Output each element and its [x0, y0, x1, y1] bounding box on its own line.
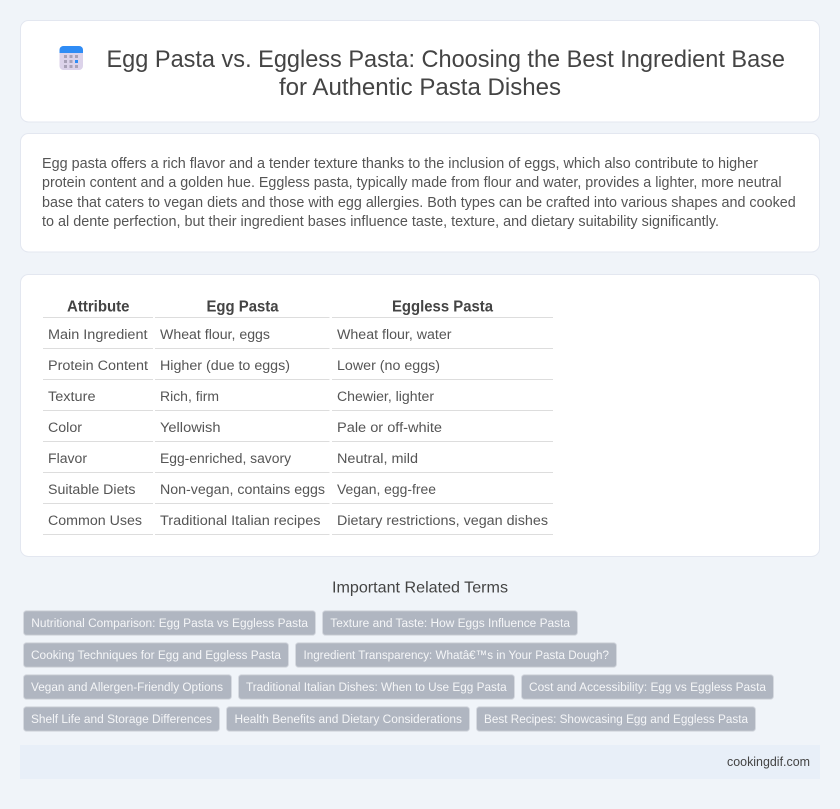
panel: title header [20, 20, 820, 122]
tag: Shelf Life and Storage Differences [31, 712, 212, 726]
table header: Egg Pasta [206, 298, 279, 316]
table row: protein content: Protein Content [48, 358, 148, 374]
table row: texture: Texture [48, 389, 96, 405]
table row: flavor: Egg-enriched, savory [160, 451, 292, 467]
table row: common uses [48, 513, 548, 529]
table row: flavor: Flavor [48, 451, 87, 467]
text block: introduction: protein content and a golden hue. Eggless pasta, typically made from flour and water, provides a lighter, more neutral [42, 175, 782, 191]
tag [24, 611, 316, 635]
table row: common uses: Traditional Italian recipes [160, 513, 320, 529]
table header [67, 298, 493, 316]
table row: protein content: Lower (no eggs) [337, 358, 440, 374]
tag: Ingredient Transparency: Whatâ€™s in Your Pasta Dough? [304, 648, 609, 662]
tag: Best Recipes: Showcasing Egg and Eggless Pasta [484, 712, 748, 726]
tag: Traditional Italian Dishes: When to Use Egg Pasta [246, 680, 507, 694]
tag [522, 675, 774, 699]
tag [226, 707, 470, 731]
table row: flavor: Neutral, mild [337, 451, 418, 467]
text block: introduction: base that caters to vegan diets and those with egg allergies. Both types can be crafted into various shapes and cooked [42, 195, 796, 211]
tag [24, 675, 232, 699]
table row: main ingredient [48, 327, 452, 343]
table row: main ingredient: Main Ingredient [48, 327, 148, 343]
table row: suitable diets: Non-vegan, contains eggs [160, 482, 325, 498]
tag [238, 675, 514, 699]
tag: Vegan and Allergen-Friendly Options [31, 680, 223, 694]
tag: Cooking Techniques for Egg and Eggless Pasta [31, 648, 281, 662]
table row: color: Color [48, 420, 82, 436]
table row: texture: Chewier, lighter [337, 389, 434, 405]
tag [24, 643, 288, 667]
table header: Eggless Pasta [392, 298, 493, 316]
footer [20, 745, 820, 779]
tag [296, 643, 616, 667]
table row: suitable diets: Vegan, egg-free [337, 482, 436, 498]
title: for Authentic Pasta Dishes [279, 74, 561, 101]
panel: comparison table [20, 274, 820, 556]
icon: calendar [60, 46, 83, 70]
table row: texture: Rich, firm [160, 389, 219, 405]
title [106, 46, 785, 101]
tag: Health Benefits and Dietary Considerations [234, 712, 462, 726]
table row: common uses: Dietary restrictions, vegan dishes [337, 513, 548, 529]
tag: Texture and Taste: How Eggs Influence Pasta [330, 616, 570, 630]
tag: Nutritional Comparison: Egg Pasta vs Eggless Pasta [31, 616, 308, 630]
table row: main ingredient: Wheat flour, water [337, 327, 452, 343]
table row: protein content: Higher (due to eggs) [160, 358, 290, 374]
table row: color: Yellowish [160, 420, 220, 436]
tag [322, 611, 578, 635]
tag [24, 707, 220, 731]
table row: flavor [48, 451, 418, 467]
text block: introduction [42, 156, 796, 230]
footer: cookingdif.com [727, 755, 810, 769]
table header: Attribute [67, 298, 130, 316]
table row: color [48, 420, 442, 436]
panel: introduction [20, 134, 820, 252]
table row: texture [48, 389, 434, 405]
heading: related terms: Important Related Terms [332, 580, 508, 596]
related terms tags [24, 611, 774, 731]
text block: introduction: Egg pasta offers a rich flavor and a tender texture thanks to the inclusion of eggs, which also contribute to higher [42, 156, 758, 172]
tag: Cost and Accessibility: Egg vs Eggless Pasta [529, 680, 766, 694]
table row: common uses: Common Uses [48, 513, 142, 529]
table row: suitable diets [48, 482, 436, 498]
tag [476, 707, 756, 731]
table row: protein content [48, 358, 440, 374]
text block: introduction: to al dente perfection, but their ingredient bases influence taste, texture, and dietary suitability significantly. [42, 214, 719, 230]
table row: color: Pale or off-white [337, 420, 442, 436]
title: Egg Pasta vs. Eggless Pasta: Choosing the Best Ingredient Base [106, 46, 785, 73]
table row: suitable diets: Suitable Diets [48, 482, 136, 498]
table row: main ingredient: Wheat flour, eggs [160, 327, 270, 343]
